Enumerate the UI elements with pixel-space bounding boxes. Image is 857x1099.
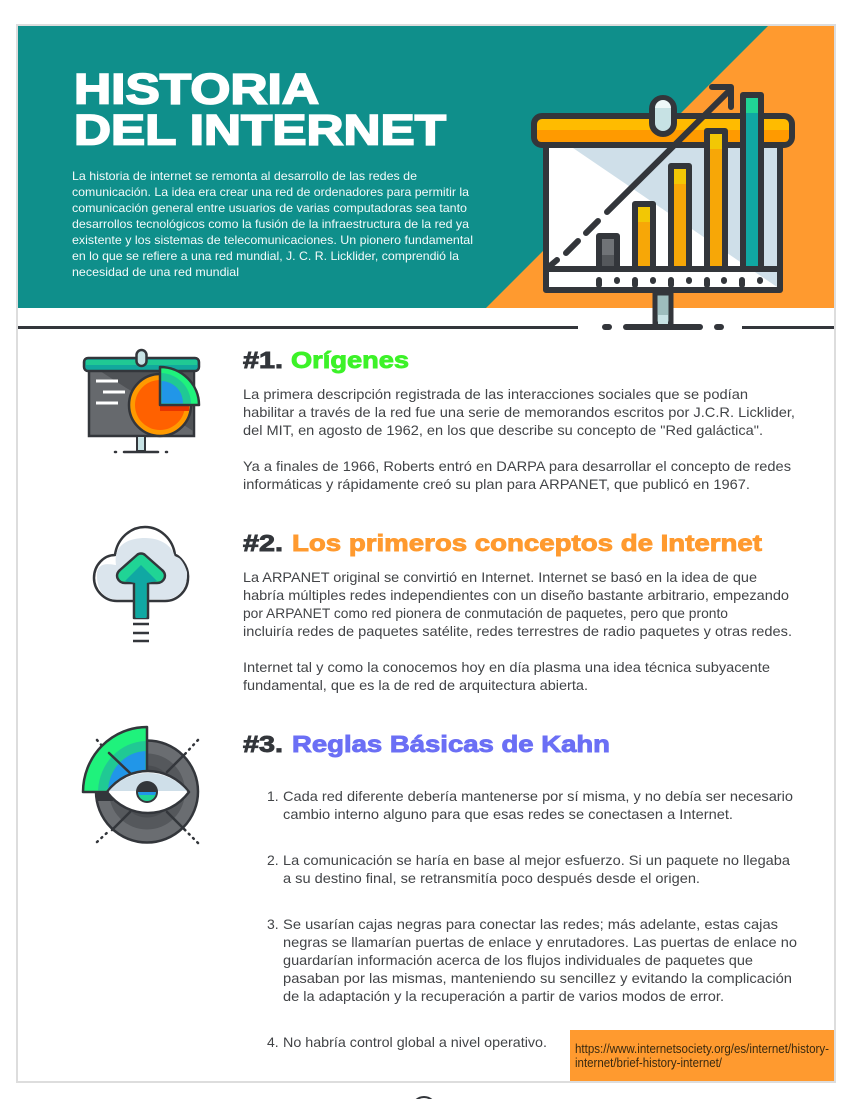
- board screen: [546, 145, 780, 290]
- text block 1: [243, 386, 795, 492]
- numbered list: 3.: [267, 916, 279, 932]
- divider with stand: [18, 293, 834, 330]
- title: HISTORIA: [74, 66, 319, 114]
- icon: eye with radar: [83, 727, 198, 843]
- numbered list: [267, 788, 797, 1050]
- numbered list: a su destino final, se retransmitía poco después desde el origen.: [283, 870, 700, 886]
- numbered list: No habría control global a nivel operativo.: [283, 1034, 547, 1050]
- intro text: desarrollos tecnológicos como la fusión de la infraestructura de la red ya: [72, 217, 469, 231]
- text block 2: [243, 569, 792, 693]
- text block 1: La primera descripción registrada de las interacciones sociales que se podían: [243, 386, 748, 402]
- numbered list: 2.: [267, 852, 279, 868]
- trend arrow: [551, 87, 760, 285]
- icon: presentation board with bar chart: [534, 87, 792, 290]
- intro text: La historia de internet se remonta al desarrollo de las redes de: [72, 169, 417, 183]
- source link box: internet/brief-history-internet/: [575, 1056, 722, 1070]
- text block 1: Ya a finales de 1966, Roberts entró en DARPA para desarrollar el concepto de redes: [243, 458, 791, 474]
- intro text: comunicación general entre usuarios de varias computadoras sea tanto: [72, 201, 467, 215]
- roller bar: [534, 116, 792, 145]
- panel: header: [18, 26, 834, 308]
- intro text: [72, 169, 473, 279]
- icon: presentation with pie chart: [84, 350, 199, 452]
- text block 1: informáticas y rápidamente creó su plan para ARPANET, que publicó en 1967.: [243, 476, 750, 492]
- numbered list: 1.: [267, 788, 279, 804]
- numbered list: 4.: [267, 1034, 279, 1050]
- text block 2: Internet tal y como la conocemos hoy en día plasma una idea técnica subyacente: [243, 659, 770, 675]
- heading 2: Los primeros conceptos de Internet: [292, 530, 762, 556]
- text block 2: incluiría redes de paquetes satélite, redes terrestres de radio paquetes y otras redes.: [243, 623, 792, 639]
- numbered list: de la adaptación y la recuperación a partir de varios modos de error.: [283, 988, 724, 1004]
- text block 2: por ARPANET como red pionera de conmutación de paquetes, pero que pronto: [243, 605, 728, 621]
- hook: [652, 98, 674, 134]
- source link box: [570, 1030, 834, 1081]
- intro text: existente y los sistemas de telecomunicaciones. Un pionero fundamental: [72, 233, 473, 247]
- heading 3: #3.: [243, 731, 283, 757]
- ticks: [599, 280, 742, 285]
- text block 2: La ARPANET original se convirtió en Internet. Internet se basó en la idea de que: [243, 569, 757, 585]
- numbered list: guardarían información acerca de los flujos individuales de paquetes que: [283, 952, 753, 968]
- intro text: comunicación. La idea era crear una red de ordenadores para permitir la: [72, 185, 469, 199]
- title: DEL INTERNET: [74, 106, 446, 154]
- heading 1: [243, 347, 409, 373]
- text block 2: habría múltiples redes independientes con un diseño bastante arbitrario, empezando: [243, 587, 789, 603]
- title: [74, 66, 446, 154]
- icon: cloud upload: [94, 527, 188, 641]
- intro text: necesidad de una red mundial: [72, 265, 239, 279]
- source link box: https://www.internetsociety.org/es/internet/history-: [575, 1042, 829, 1056]
- text block 1: del MIT, en agosto de 1962, en los que describe su concepto de "Red galáctica".: [243, 422, 763, 438]
- numbered list: Cada red diferente debería mantenerse por sí misma, y no debía ser necesario: [283, 788, 793, 804]
- heading 1: Orígenes: [291, 347, 409, 373]
- heading 3: Reglas Básicas de Kahn: [292, 731, 610, 757]
- heading 1: #1.: [243, 347, 283, 373]
- numbered list: pasaban por las mismas, manteniendo su sencillez y evitando la complicación: [283, 970, 792, 986]
- text block 1: habilitar a través de la red fue una serie de memorandos escritos por J.C.R. Licklider,: [243, 404, 795, 420]
- numbered list: La comunicación se haría en base al mejor esfuerzo. Si un paquete no llegaba: [283, 852, 790, 868]
- numbered list: cambio interno alguno para que esas redes se conectasen a Internet.: [283, 806, 733, 822]
- heading 2: #2.: [243, 530, 283, 556]
- bars: [599, 236, 617, 269]
- intro text: en lo que se refiere a una red mundial, J. C. R. Licklider, comprendió la: [72, 249, 459, 263]
- numbered list: Se usarían cajas negras para conectar las redes; más adelante, estas cajas: [283, 916, 778, 932]
- text block 2: fundamental, que es la de red de arquitectura abierta.: [243, 677, 588, 693]
- numbered list: negras se llamarían puertas de enlace y enrutadores. Las puertas de enlace no: [283, 934, 797, 950]
- cropped circle at bottom: [412, 1097, 436, 1099]
